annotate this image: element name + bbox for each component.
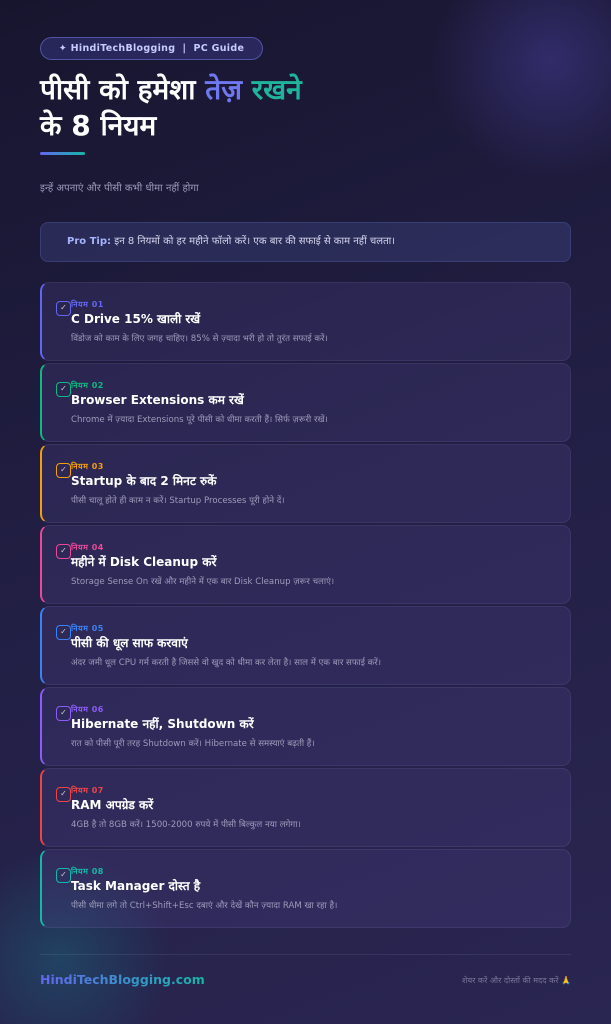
footer brand: HindiTechBlogging.com — [40, 972, 205, 987]
card 8 — [40, 849, 571, 928]
title underline — [40, 152, 85, 155]
card 7: ✓ — [60, 789, 67, 798]
badge: ✦ HindiTechBlogging | PC Guide — [59, 43, 244, 54]
card 6: रात को पीसी पूरी तरह Shutdown करें। Hibernate से समस्याएं बढ़ती हैं। — [71, 739, 315, 749]
card 1 — [40, 282, 571, 361]
title: पीसी को हमेशा तेज़ रखने — [40, 73, 302, 106]
title — [40, 73, 303, 142]
card 4: Storage Sense On रखें और महीने में एक बार Disk Cleanup ज़रूर चलाएं। — [71, 577, 334, 587]
subtitle: इन्हें अपनाएं और पीसी कभी धीमा नहीं होगा — [40, 183, 199, 194]
card 3: पीसी चालू होते ही काम न करें। Startup Processes पूरी होने दें। — [71, 496, 285, 506]
pro tip callout: Pro Tip: इन 8 नियमों को हर महीने फॉलो करें। एक बार की सफाई से काम नहीं चलता। — [67, 236, 395, 247]
card 5: ✓ — [60, 627, 67, 636]
card 1: विंडोज को काम के लिए जगह चाहिए। 85% से ज़्यादा भरी हो तो तुरंत सफाई करें। — [71, 334, 328, 344]
card 2: Browser Extensions कम रखें — [71, 393, 244, 407]
card 4: महीने में Disk Cleanup करें — [71, 555, 216, 569]
badge — [40, 37, 263, 60]
card 8: पीसी धीमा लगे तो Ctrl+Shift+Esc दबाएं और देखें कौन ज़्यादा RAM खा रहा है। — [71, 901, 337, 911]
card 2: Chrome में ज़्यादा Extensions पूरे पीसी को धीमा करती हैं। सिर्फ ज़रूरी रखें। — [71, 415, 328, 425]
title: के 8 नियम — [40, 109, 156, 142]
card 3: नियम 03 — [71, 462, 104, 471]
card 4: ✓ — [60, 546, 67, 555]
card 7 — [40, 768, 571, 847]
card 5: पीसी की धूल साफ करवाएं — [71, 636, 188, 650]
card 6: Hibernate नहीं, Shutdown करें — [71, 717, 254, 731]
card 5: अंदर जमी धूल CPU गर्म करती है जिससे वो खुद को धीमा कर लेता है। साल में एक बार सफाई करें। — [71, 658, 381, 668]
card 1: ✓ — [60, 303, 67, 312]
card 2: नियम 02 — [71, 381, 104, 390]
card 7: नियम 07 — [71, 786, 104, 795]
footer share text: शेयर करें और दोस्तों की मदद करें 🙏 — [462, 976, 571, 985]
pro tip callout — [40, 222, 571, 262]
card 5: नियम 05 — [71, 624, 104, 633]
card 4: नियम 04 — [71, 543, 104, 552]
card 4 — [40, 525, 571, 604]
card 3: Startup के बाद 2 मिनट रुकें — [71, 474, 216, 488]
card 7: RAM अपग्रेड करें — [71, 798, 153, 812]
card 7: 4GB है तो 8GB करें। 1500-2000 रुपये में पीसी बिल्कुल नया लगेगा। — [71, 820, 301, 830]
card 6: नियम 06 — [71, 705, 104, 714]
card 5 — [40, 606, 571, 685]
card 8: Task Manager दोस्त है — [71, 879, 200, 893]
card 3: ✓ — [60, 465, 67, 474]
card 1: नियम 01 — [71, 300, 104, 309]
card 8: नियम 08 — [71, 867, 104, 876]
card 2 — [40, 363, 571, 442]
card 6 — [40, 687, 571, 766]
card 1: C Drive 15% खाली रखें — [71, 312, 200, 326]
card 8: ✓ — [60, 870, 67, 879]
card 2: ✓ — [60, 384, 67, 393]
card 6: ✓ — [60, 708, 67, 717]
card 3 — [40, 444, 571, 523]
